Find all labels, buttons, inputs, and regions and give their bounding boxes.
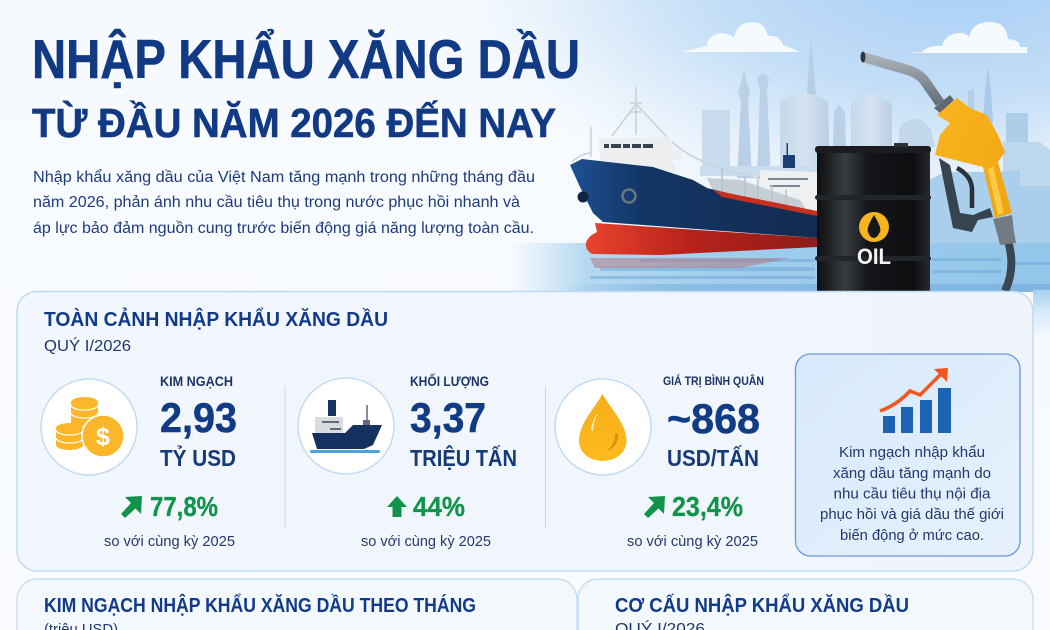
- change: 23,4%: [672, 491, 743, 522]
- intro paragraph: [33, 169, 535, 237]
- cloud right: [909, 22, 1027, 53]
- callout: [796, 354, 1020, 556]
- spout tip: [860, 52, 866, 62]
- arrow up: [387, 496, 407, 517]
- panel heading: TOÀN CẢNH NHẬP KHẨU XĂNG DẦU: [44, 307, 388, 331]
- label: KIM NGẠCH: [160, 374, 233, 389]
- metric: average price: [555, 373, 764, 550]
- title: TỪ ĐẦU NĂM 2026 ĐẾN NAY: [32, 100, 556, 146]
- intro paragraph: năm 2026, phản ánh nhu cầu tiêu thụ trong nước phục hồi nhanh và: [33, 194, 520, 211]
- navy hull: [570, 159, 817, 238]
- change: 44%: [413, 491, 465, 522]
- callout box: [796, 354, 1020, 556]
- panel: monthly import value: [17, 579, 577, 630]
- hull reflection: [590, 258, 790, 268]
- panel subheading: QUÝ I/2026: [44, 338, 131, 355]
- collar: [993, 215, 1016, 245]
- value: 3,37: [410, 394, 486, 441]
- hose: [1005, 241, 1011, 291]
- handle: [939, 158, 993, 232]
- bridge: [599, 137, 682, 172]
- label: KHỐI LƯỢNG: [410, 374, 489, 389]
- deck tanks: [707, 178, 807, 211]
- trigger: [957, 168, 972, 208]
- aft superstructure: [760, 170, 817, 213]
- hull emblem: [622, 190, 636, 202]
- yellow body: [935, 98, 1012, 218]
- rim and ribs: [815, 146, 931, 153]
- spout collar: [934, 95, 954, 113]
- callout text: Kim ngạch nhập khẩu: [839, 444, 985, 461]
- label: GIÁ TRỊ BÌNH QUÂN: [663, 373, 764, 388]
- unit: TRIỆU TẤN: [410, 444, 517, 471]
- cap: [894, 143, 908, 147]
- red lower hull: [586, 223, 817, 255]
- intro paragraph: Nhập khẩu xăng dầu của Việt Nam tăng mạnh trong những tháng đầu: [33, 169, 535, 186]
- panel: import structure: [578, 579, 1033, 630]
- unit: TỶ USD: [160, 443, 236, 471]
- oil badge: [859, 212, 889, 242]
- OIL label: OIL: [857, 244, 891, 269]
- oil barrel: [815, 143, 931, 291]
- panel: overview: [17, 292, 1033, 571]
- sea ripples: [590, 258, 1050, 279]
- change: 77,8%: [150, 491, 218, 522]
- comparison: so với cùng kỳ 2025: [361, 533, 491, 550]
- red deck strip: [713, 190, 817, 216]
- callout text: nhu cầu tiêu thụ nội địa: [834, 486, 991, 502]
- deck stanchions: [722, 168, 786, 208]
- divider: [545, 386, 546, 528]
- comparison: so với cùng kỳ 2025: [104, 533, 235, 550]
- callout text: biến động ở mức cao.: [840, 527, 984, 544]
- panel background: [17, 292, 1033, 571]
- icon: rising bar chart: [880, 368, 951, 433]
- sea: [510, 243, 1050, 292]
- anchor: [578, 192, 588, 202]
- panel heading: KIM NGẠCH NHẬP KHẨU XĂNG DẦU THEO THÁNG: [44, 593, 476, 617]
- metric: volume: [298, 374, 517, 550]
- sea lower band: [560, 284, 1050, 292]
- refinery skyline: [700, 40, 1050, 243]
- aft funnel: [783, 143, 795, 168]
- icon: tanker ship: [298, 378, 394, 474]
- panel background: [578, 579, 1033, 630]
- sky: [600, 60, 1050, 250]
- spout: [863, 57, 940, 103]
- hero illustration: sky, refinery, ship, oil barrel, fuel nozzle: [440, 0, 1050, 292]
- body highlight: [988, 166, 1004, 215]
- bridge windows: [604, 144, 653, 148]
- callout text: [820, 444, 1004, 544]
- comparison: so với cùng kỳ 2025: [627, 533, 758, 550]
- icon: gold coins: $: [96, 423, 110, 451]
- value: 2,93: [160, 394, 237, 441]
- title: NHẬP KHẨU XĂNG DẦU: [32, 28, 580, 90]
- callout text: xăng dầu tăng mạnh do: [833, 465, 991, 482]
- panel heading: CƠ CẤU NHẬP KHẨU XĂNG DẦU: [615, 593, 909, 617]
- icon: gold coins: [41, 379, 137, 475]
- metric: import value: [41, 374, 237, 550]
- title: [32, 28, 580, 146]
- callout text: phục hồi và giá dầu thế giới: [820, 506, 1004, 523]
- intro paragraph: áp lực bảo đảm nguồn cung trước biến động giá năng lượng toàn cầu.: [33, 220, 534, 237]
- panel background: [17, 579, 577, 630]
- fuel nozzle: [860, 52, 1016, 291]
- forward mast and stays: [572, 87, 800, 190]
- divider: [284, 386, 286, 528]
- arrow up-right: [644, 496, 665, 518]
- icon: oil drop: [555, 379, 651, 475]
- value: ~868: [667, 395, 760, 442]
- ship: [570, 87, 817, 255]
- right page edge glow: [1033, 290, 1050, 410]
- unit: USD/TẤN: [667, 444, 759, 471]
- arrow up-right: [121, 496, 142, 518]
- cloud left: [682, 22, 800, 52]
